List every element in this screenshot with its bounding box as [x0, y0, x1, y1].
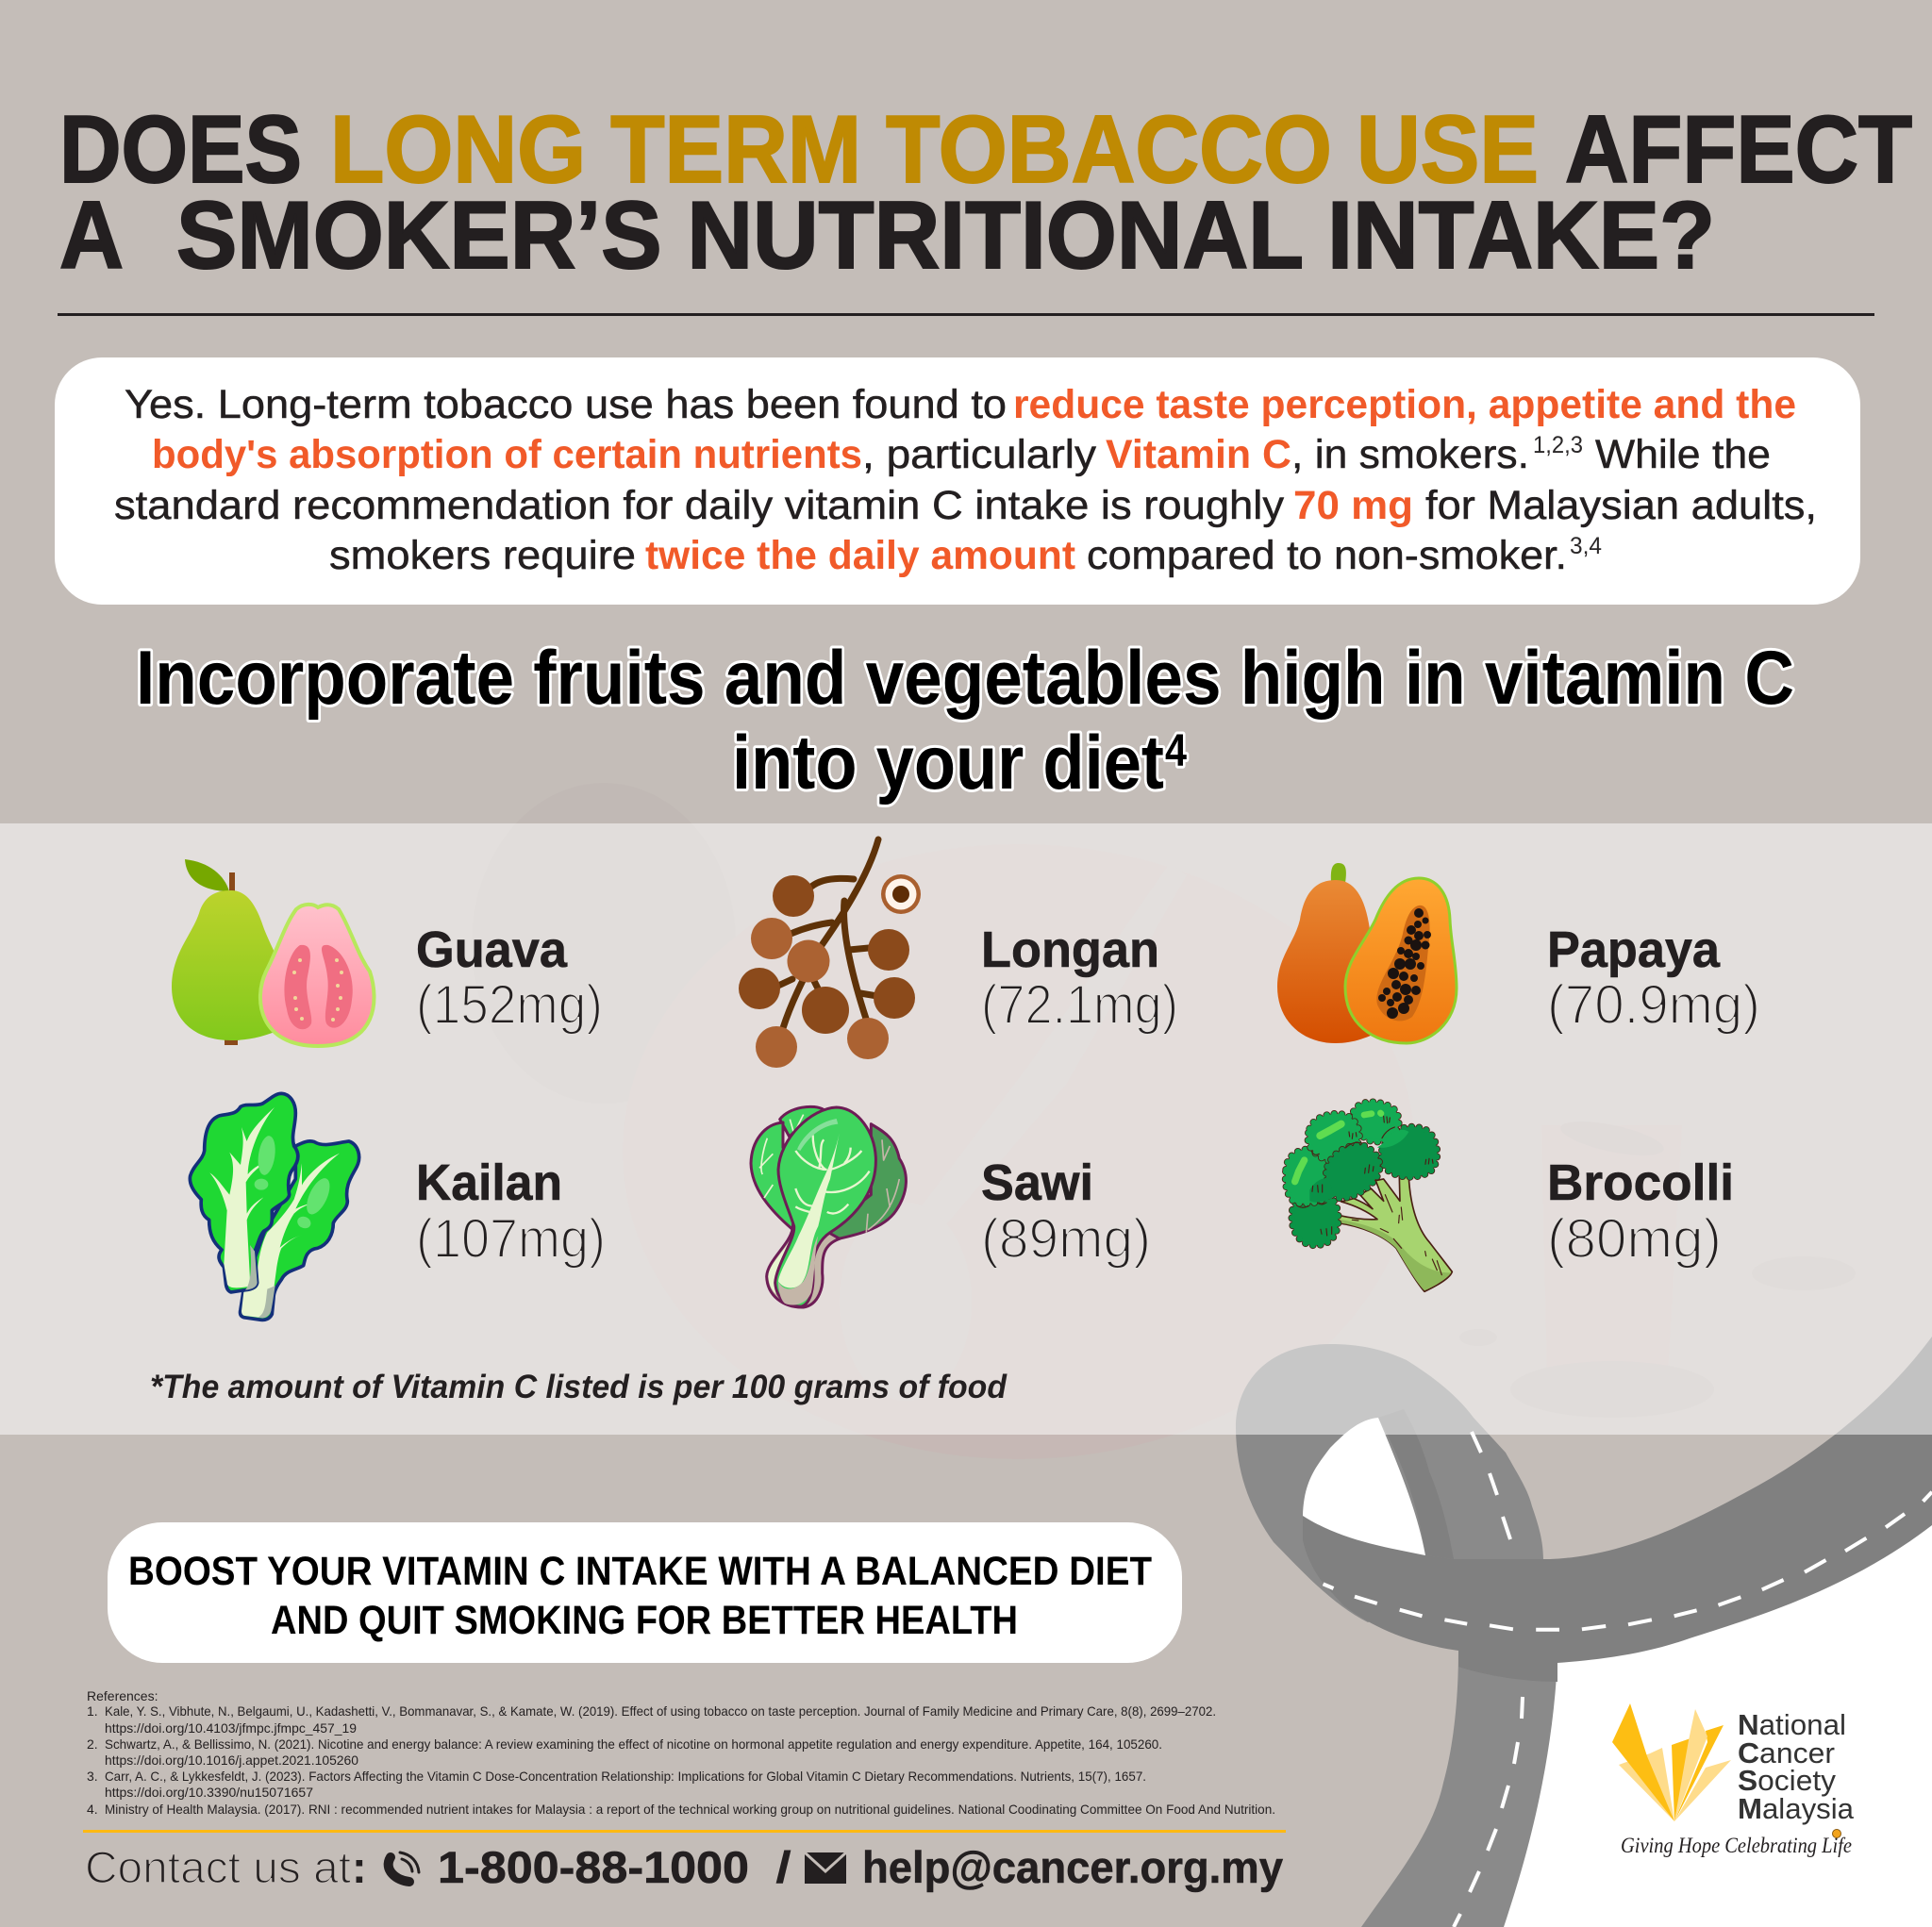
- floret: right: [1381, 1127, 1437, 1177]
- title: DOES: [59, 97, 302, 203]
- icon: brocolli: [1286, 1102, 1452, 1291]
- contact line: :: [352, 1842, 367, 1892]
- road: descending lower arm: [1361, 1651, 1557, 1927]
- icon: papaya: [1277, 863, 1457, 1043]
- floret: top: [1353, 1102, 1399, 1141]
- panel: fruits and vegetables background: [0, 823, 1932, 1435]
- logo wordmark: Malaysia: [1738, 1792, 1855, 1825]
- title: AFFECT: [1565, 97, 1912, 203]
- panel: intro paragraph: [55, 357, 1860, 605]
- title: LONG TERM TOBACCO USE: [330, 97, 1539, 203]
- logo tagline: Giving Hope Celebrating Life: [1621, 1834, 1852, 1857]
- title: [59, 97, 1912, 289]
- floret: centre: [1326, 1145, 1379, 1198]
- label: longan: Longan: [981, 922, 1159, 978]
- paragraph text: Vitamin C: [1106, 432, 1291, 477]
- contact line: Contact us at: [85, 1842, 351, 1892]
- road ribbon: [1236, 1337, 1932, 1927]
- label: guava: Guava: [416, 922, 568, 978]
- paragraph text: , in smokers.: [1291, 432, 1529, 477]
- contact line: [85, 1842, 1283, 1892]
- references: 1.: [87, 1703, 98, 1719]
- floret: left: [1286, 1150, 1335, 1204]
- icon: mail: [805, 1852, 846, 1884]
- label: papaya: (70.9mg): [1547, 974, 1760, 1036]
- references: 3.: [87, 1769, 98, 1784]
- paragraph text: [114, 382, 1817, 578]
- references: https://doi.org/10.4103/jfmpc.jfmpc_457_19: [105, 1720, 357, 1736]
- floret: upper left: [1307, 1114, 1359, 1161]
- paragraph text: , particularly: [862, 432, 1097, 477]
- label: kailan: [416, 1155, 606, 1270]
- paragraph text: 70 mg: [1293, 483, 1413, 528]
- icon: kailan: [190, 1093, 359, 1320]
- paragraph text: smokers require: [329, 533, 636, 578]
- label: guava: (152mg): [416, 974, 603, 1036]
- title: SMOKER’S NUTRITIONAL INTAKE?: [176, 183, 1715, 289]
- floret: lower left: [1291, 1192, 1339, 1245]
- label: brocolli: [1547, 1155, 1734, 1270]
- paragraph text: body's absorption of certain nutrients: [152, 432, 862, 477]
- label: brocolli: (80mg): [1547, 1208, 1722, 1270]
- road: main band: [1303, 1337, 1932, 1682]
- callout: boost vitamin C: AND QUIT SMOKING FOR BETTER HEALTH: [271, 1598, 1018, 1643]
- label: longan: (72.1mg): [981, 974, 1178, 1036]
- white corner background: [1415, 1509, 1932, 1927]
- heading: incorporate fruits and vegetables: into your diet: [732, 721, 1164, 806]
- icon: phone: [389, 1852, 419, 1882]
- paragraph text: compared to non-smoker.: [1087, 533, 1567, 578]
- logo: National Cancer Society Malaysia: [1612, 1703, 1855, 1857]
- references: 2.: [87, 1736, 98, 1752]
- references: https://doi.org/10.1016/j.appet.2021.105260: [105, 1753, 358, 1768]
- label: papaya: Papaya: [1547, 922, 1721, 978]
- label: kailan: Kailan: [416, 1155, 562, 1211]
- contact line: /: [775, 1842, 791, 1892]
- paragraph text: twice the daily amount: [645, 533, 1075, 578]
- references: Carr, A. C., & Lykkesfeldt, J. (2023). Factors Affecting the Vitamin C Dose-Concentration Relationship: Implications for Global Vitamin C Dietary Recommendations. Nutrients, 15(7), 1657.: [105, 1769, 1146, 1784]
- paragraph text: standard recommendation for daily vitamin C intake is roughly: [114, 483, 1285, 528]
- references: 4.: [87, 1802, 98, 1817]
- paragraph text: for Malaysian adults,: [1425, 483, 1817, 528]
- road: ribbon loop lighter arm: [1236, 1344, 1543, 1622]
- references: Ministry of Health Malaysia. (2017). RNI : recommended nutrient intakes for Malaysia : a report of the technical working group on nutritional guidelines. National Coodinating Committee On Food And Nutrition.: [105, 1802, 1275, 1817]
- background: faint teacup illustration: [472, 783, 1856, 1459]
- label: longan: [981, 922, 1178, 1036]
- callout: boost vitamin C: [108, 1522, 1182, 1663]
- label: sawi: Sawi: [981, 1155, 1093, 1211]
- logo wordmark: Society: [1738, 1764, 1837, 1797]
- contact line: help@cancer.org.my: [862, 1842, 1283, 1892]
- title: A: [59, 183, 124, 289]
- references: Schwartz, A., & Bellissimo, N. (2021). Nicotine and energy balance: A review examining the effect of nicotine on hormonal appetite regulation and energy expenditure. Appetite, 164, 105260.: [105, 1736, 1162, 1752]
- logo wordmark: Cancer: [1738, 1736, 1835, 1769]
- icon: sawi: [751, 1106, 906, 1307]
- heading: incorporate fruits and vegetables: [136, 636, 1794, 806]
- road: dark strip beside hole: [1378, 1409, 1454, 1559]
- references: References:: [87, 1688, 158, 1703]
- references: Kale, Y. S., Vibhute, N., Belgaumi, U., Kadashetti, V., Bommanavar, S., & Kamate, W. (2019). Effect of using tobacco on taste perception. Journal of Family Medicine and Primary Care, 8(8), 2699–2702.: [105, 1703, 1216, 1719]
- heading: incorporate fruits and vegetables: Incorporate fruits and vegetables high in vitamin C: [136, 636, 1794, 721]
- label: guava: [416, 922, 603, 1036]
- footnote: vitamin C amounts: *The amount of Vitamin C listed is per 100 grams of food: [150, 1369, 1008, 1405]
- label: papaya: [1547, 922, 1760, 1036]
- callout: boost vitamin C: BOOST YOUR VITAMIN C INTAKE WITH A BALANCED DIET: [128, 1549, 1152, 1594]
- logo mark: [1612, 1703, 1731, 1821]
- icon: guava: [172, 859, 375, 1046]
- logo wordmark: [1738, 1708, 1855, 1825]
- paragraph text: reduce taste perception, appetite and the: [1013, 382, 1796, 427]
- heading: incorporate fruits and vegetables: 4: [1165, 726, 1187, 776]
- road: dashed centre lines: [1324, 1432, 1932, 1927]
- references: https://doi.org/10.3390/nu15071657: [105, 1785, 313, 1800]
- label: kailan: (107mg): [416, 1208, 606, 1270]
- icon: longan: [739, 839, 921, 1068]
- paragraph text: Yes. Long-term tobacco use has been found to: [125, 382, 1007, 427]
- paragraph text: While the: [1595, 432, 1771, 477]
- references: [87, 1688, 1275, 1817]
- paragraph text: 1,2,3: [1533, 432, 1583, 458]
- white hole in the ribbon: [1303, 1418, 1425, 1555]
- label: sawi: [981, 1155, 1151, 1270]
- contact line: 1-800-88-1000: [438, 1842, 749, 1892]
- logo wordmark: National: [1738, 1708, 1846, 1741]
- label: sawi: (89mg): [981, 1208, 1151, 1270]
- paragraph text: 3,4: [1570, 533, 1602, 559]
- label: brocolli: Brocolli: [1547, 1155, 1734, 1211]
